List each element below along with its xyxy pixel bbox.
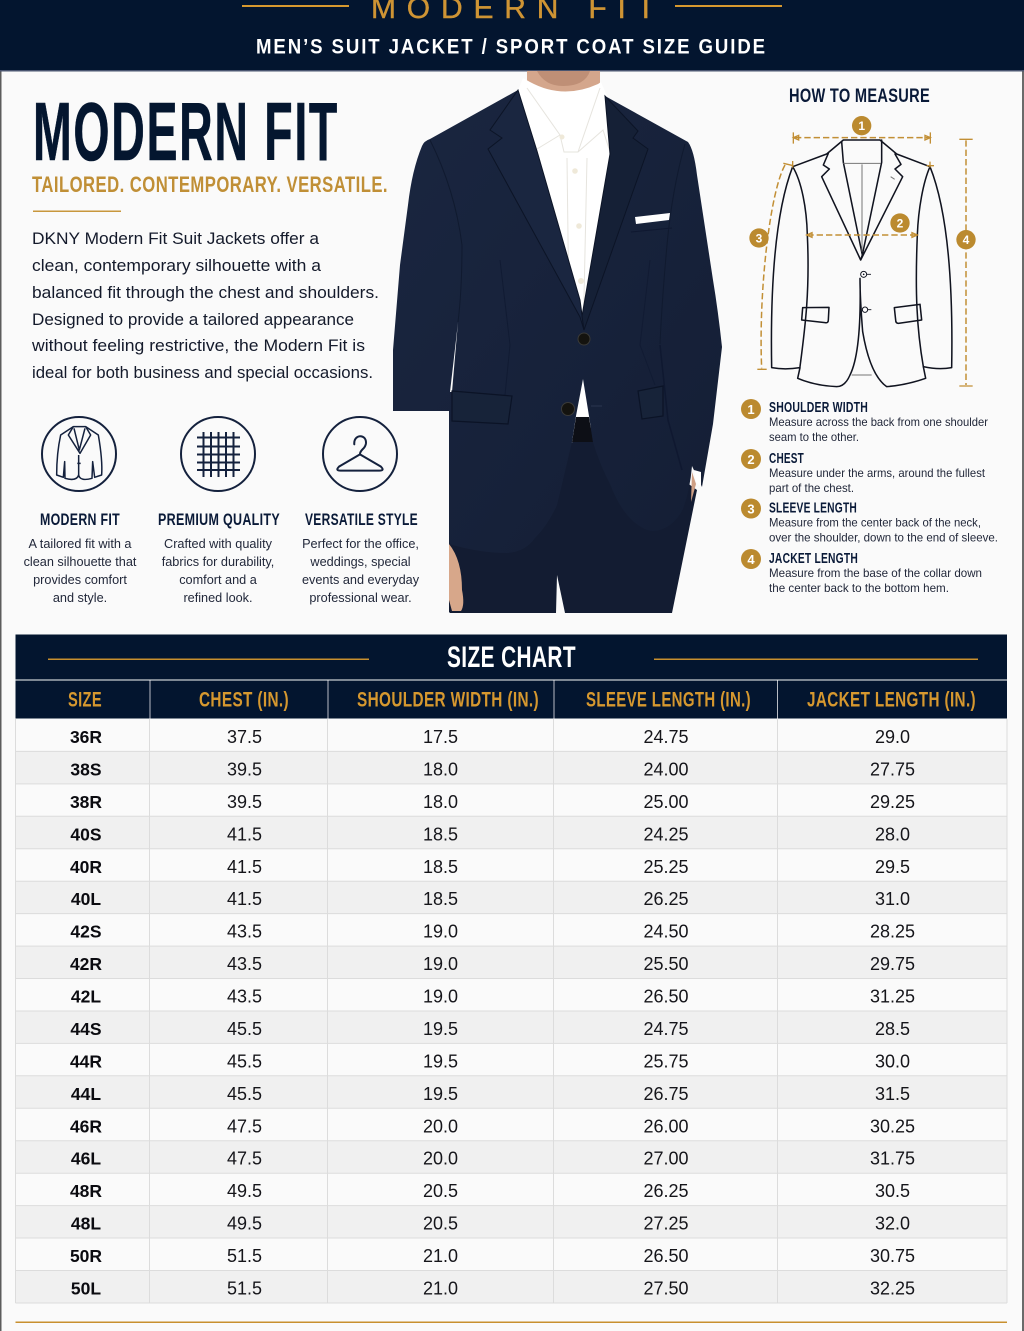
- step 4: jacket length: [741, 549, 982, 595]
- row 48R: 48R: [70, 1181, 102, 1201]
- row 50L: 51.5: [227, 1278, 262, 1298]
- panel: feature premium quality: refined look.: [183, 591, 253, 605]
- panel: feature premium quality: comfort and a: [179, 573, 258, 587]
- row 40R: 41.5: [227, 857, 262, 877]
- row 38R: 25.00: [643, 792, 689, 812]
- panel: feature versatile style: professional wear.: [309, 591, 412, 605]
- row 46L: 46L: [71, 1149, 101, 1169]
- row 40R: 25.25: [643, 857, 689, 877]
- row 42R: 43.5: [227, 954, 262, 974]
- row 36R: 36R: [70, 727, 102, 747]
- step 3: sleeve length: 3: [747, 502, 755, 516]
- row 50R: 21.0: [423, 1246, 458, 1266]
- row 42S: 28.25: [870, 922, 915, 942]
- row 36R: 24.75: [643, 727, 689, 747]
- row 44S: 44S: [70, 1019, 102, 1039]
- row 50L: 50L: [71, 1278, 101, 1298]
- row 50R: 26.50: [643, 1246, 689, 1266]
- row 40R: 18.5: [423, 857, 458, 877]
- row 40L: 26.25: [643, 889, 689, 909]
- row 44L: 45.5: [227, 1084, 262, 1104]
- step 2: chest: CHEST: [769, 451, 804, 467]
- row 40L: 40L: [71, 889, 101, 909]
- row 46R: 46R: [70, 1116, 102, 1136]
- row 40L: [16, 881, 1007, 914]
- row 42R: 25.50: [643, 954, 689, 974]
- row 44L: 26.75: [643, 1084, 689, 1104]
- row 44L: 31.5: [875, 1084, 910, 1104]
- panel: feature versatile style: VERSATILE STYLE: [305, 511, 418, 529]
- row 50L: 27.50: [643, 1278, 689, 1298]
- panel: feature premium quality: [158, 417, 280, 605]
- row 38S: 24.00: [643, 759, 689, 779]
- row 38S: 38S: [70, 759, 102, 779]
- intro paragraph: clean, contemporary silhouette with a: [32, 256, 322, 275]
- panel: feature versatile style: events and everyday: [302, 573, 420, 587]
- row 46R: 30.25: [870, 1116, 915, 1136]
- icon: hanger in circle: [323, 417, 397, 491]
- step 3: sleeve length: [741, 498, 998, 544]
- intro paragraph: ideal for both business and special occasions.: [32, 363, 373, 382]
- photo: model wearing navy suit jacket: [393, 71, 722, 613]
- row 46R: [16, 1108, 1007, 1141]
- row 36R: 29.0: [875, 727, 910, 747]
- header banner: MEN’S SUIT JACKET / SPORT COAT SIZE GUIDE: [256, 34, 767, 58]
- row 40L: 31.0: [875, 889, 910, 909]
- table header row: [16, 680, 1007, 718]
- step 2: chest: 2: [747, 452, 755, 467]
- row 36R: 37.5: [227, 727, 262, 747]
- step 1: shoulder width: Measure across the back from one shoulder: [769, 415, 988, 429]
- table header row: SHOULDER WIDTH (IN.): [357, 688, 539, 712]
- row 42L: 26.50: [643, 986, 689, 1006]
- diagram: jacket measurement outline: 1: [858, 119, 865, 133]
- row 42S: 19.0: [423, 922, 458, 942]
- row 50L: 32.25: [870, 1278, 915, 1298]
- row 42R: 29.75: [870, 954, 915, 974]
- intro paragraph: balanced fit through the chest and shoulders.: [32, 283, 379, 302]
- row 44L: 19.5: [423, 1084, 458, 1104]
- row 40R: 40R: [70, 857, 102, 877]
- diagram: jacket measurement outline: 2: [897, 216, 904, 230]
- row 44S: [16, 1011, 1007, 1043]
- row 38R: 39.5: [227, 792, 262, 812]
- row 42L: 42L: [71, 986, 101, 1006]
- row 50R: [16, 1238, 1007, 1270]
- step 2: chest: Measure under the arms, around the fullest: [769, 466, 986, 480]
- row 38S: [16, 751, 1007, 784]
- row 42S: 43.5: [227, 922, 262, 942]
- row 44R: 45.5: [227, 1051, 262, 1071]
- row 46R: 20.0: [423, 1116, 458, 1136]
- size chart title bar: [16, 634, 1007, 680]
- row 48L: 20.5: [423, 1214, 458, 1234]
- step 4: jacket length: the center back to the bottom hem.: [769, 581, 949, 595]
- intro paragraph: without feeling restrictive, the Modern Fit is: [31, 336, 365, 355]
- intro paragraph: [31, 229, 379, 382]
- row 44R: 25.75: [643, 1051, 689, 1071]
- row 48R: 30.5: [875, 1181, 910, 1201]
- row 48L: 32.0: [875, 1214, 910, 1234]
- heading: how to measure: HOW TO MEASURE: [789, 85, 930, 107]
- row 38S: 39.5: [227, 759, 262, 779]
- row 40R: [16, 849, 1007, 881]
- row 48R: [16, 1173, 1007, 1206]
- row 50L: [16, 1270, 1007, 1303]
- row 48L: 48L: [71, 1214, 101, 1234]
- panel: feature modern fit: provides comfort: [33, 573, 127, 587]
- row 44R: 19.5: [423, 1051, 458, 1071]
- diagram: jacket measurement outline: [749, 116, 976, 387]
- row 44R: 30.0: [875, 1051, 910, 1071]
- row 36R: 17.5: [423, 727, 458, 747]
- panel: feature versatile style: [302, 417, 420, 605]
- row 44S: 28.5: [875, 1019, 910, 1039]
- panel: feature premium quality: fabrics for durability,: [162, 555, 274, 569]
- main title: MODERN FIT: [33, 85, 339, 178]
- row 40S: 40S: [70, 824, 102, 844]
- row 38R: 29.25: [870, 792, 915, 812]
- row 44S: 19.5: [423, 1019, 458, 1039]
- row 46R: 26.00: [643, 1116, 689, 1136]
- row 42S: [16, 914, 1007, 946]
- diagram: jacket measurement outline: 4: [963, 233, 970, 247]
- row 42R: 19.0: [423, 954, 458, 974]
- panel: feature premium quality: PREMIUM QUALITY: [158, 511, 280, 529]
- panel: feature premium quality: Crafted with quality: [164, 537, 273, 551]
- table header row: SIZE: [68, 688, 102, 712]
- row 50R: 51.5: [227, 1246, 262, 1266]
- row 40R: 29.5: [875, 857, 910, 877]
- table header row: SLEEVE LENGTH (IN.): [586, 688, 751, 712]
- row 42L: [16, 978, 1007, 1011]
- step 1: shoulder width: 1: [747, 402, 755, 417]
- row 42L: 19.0: [423, 986, 458, 1006]
- step 4: jacket length: Measure from the base of the collar down: [769, 566, 982, 580]
- step 2: chest: [741, 449, 986, 495]
- step 1: shoulder width: [741, 399, 988, 444]
- row 44R: 44R: [70, 1051, 102, 1071]
- row 50R: 30.75: [870, 1246, 915, 1266]
- row 40S: 18.5: [423, 824, 458, 844]
- panel: feature modern fit: A tailored fit with a: [29, 537, 132, 551]
- row 48R: 49.5: [227, 1181, 262, 1201]
- row 44R: [16, 1043, 1007, 1076]
- row 42R: 42R: [70, 954, 102, 974]
- step 3: sleeve length: Measure from the center back of the neck,: [769, 516, 981, 530]
- row 42L: 43.5: [227, 986, 262, 1006]
- panel: feature versatile style: Perfect for the office,: [302, 537, 419, 551]
- row 40S: [16, 816, 1007, 849]
- size chart title bar: SIZE CHART: [447, 641, 576, 674]
- row 42R: [16, 946, 1007, 978]
- panel: feature versatile style: weddings, special: [309, 555, 411, 569]
- row 46L: 20.0: [423, 1149, 458, 1169]
- panel: feature modern fit: and style.: [53, 591, 107, 605]
- row 50R: 50R: [70, 1246, 102, 1266]
- row 40S: 41.5: [227, 824, 262, 844]
- step 4: jacket length: 4: [747, 552, 755, 567]
- row 44S: 45.5: [227, 1019, 262, 1039]
- row 44L: 44L: [71, 1084, 101, 1104]
- row 40S: 24.25: [643, 824, 689, 844]
- row 46L: 31.75: [870, 1149, 915, 1169]
- header banner: [0, 0, 1024, 72]
- row 38R: 38R: [70, 792, 102, 812]
- row 42L: 31.25: [870, 986, 915, 1006]
- step 2: chest: part of the chest.: [769, 481, 854, 495]
- panel: size chart table: [16, 634, 1007, 1303]
- panel: feature modern fit: clean silhouette that: [24, 555, 137, 569]
- row 38S: 18.0: [423, 759, 458, 779]
- step 1: shoulder width: seam to the other.: [769, 430, 859, 444]
- row 40S: 28.0: [875, 824, 910, 844]
- row 48L: 27.25: [643, 1214, 689, 1234]
- row 46L: 47.5: [227, 1149, 262, 1169]
- diagram: jacket measurement outline: 3: [756, 231, 763, 245]
- row 40L: 18.5: [423, 889, 458, 909]
- row 44L: [16, 1076, 1007, 1108]
- icon: jacket in circle: [42, 417, 116, 491]
- panel: feature modern fit: MODERN FIT: [40, 511, 120, 529]
- icon: fabric weave grid in circle: [181, 417, 255, 491]
- row 38R: 18.0: [423, 792, 458, 812]
- row 48R: 26.25: [643, 1181, 689, 1201]
- row 38R: [16, 784, 1007, 816]
- step 4: jacket length: JACKET LENGTH: [769, 551, 858, 567]
- row 36R: [16, 719, 1007, 751]
- panel: feature modern fit: [24, 417, 137, 605]
- row 40L: 41.5: [227, 889, 262, 909]
- intro paragraph: DKNY Modern Fit Suit Jackets offer a: [32, 229, 320, 248]
- row 46R: 47.5: [227, 1116, 262, 1136]
- intro paragraph: Designed to provide a tailored appearance: [32, 310, 354, 329]
- row 48R: 20.5: [423, 1181, 458, 1201]
- row 46L: 27.00: [643, 1149, 689, 1169]
- table header row: CHEST (IN.): [199, 688, 289, 712]
- step 3: sleeve length: SLEEVE LENGTH: [769, 500, 857, 516]
- row 38S: 27.75: [870, 759, 915, 779]
- row 48L: [16, 1206, 1007, 1238]
- row 46L: [16, 1141, 1007, 1173]
- row 50L: 21.0: [423, 1278, 458, 1298]
- row 42S: 42S: [70, 922, 102, 942]
- row 48L: 49.5: [227, 1214, 262, 1234]
- tagline: TAILORED. CONTEMPORARY. VERSATILE.: [32, 172, 388, 197]
- step 3: sleeve length: over the shoulder, down to the end of sleeve.: [769, 530, 998, 544]
- step 1: shoulder width: SHOULDER WIDTH: [769, 400, 868, 416]
- row 42S: 24.50: [643, 922, 689, 942]
- row 44S: 24.75: [643, 1019, 689, 1039]
